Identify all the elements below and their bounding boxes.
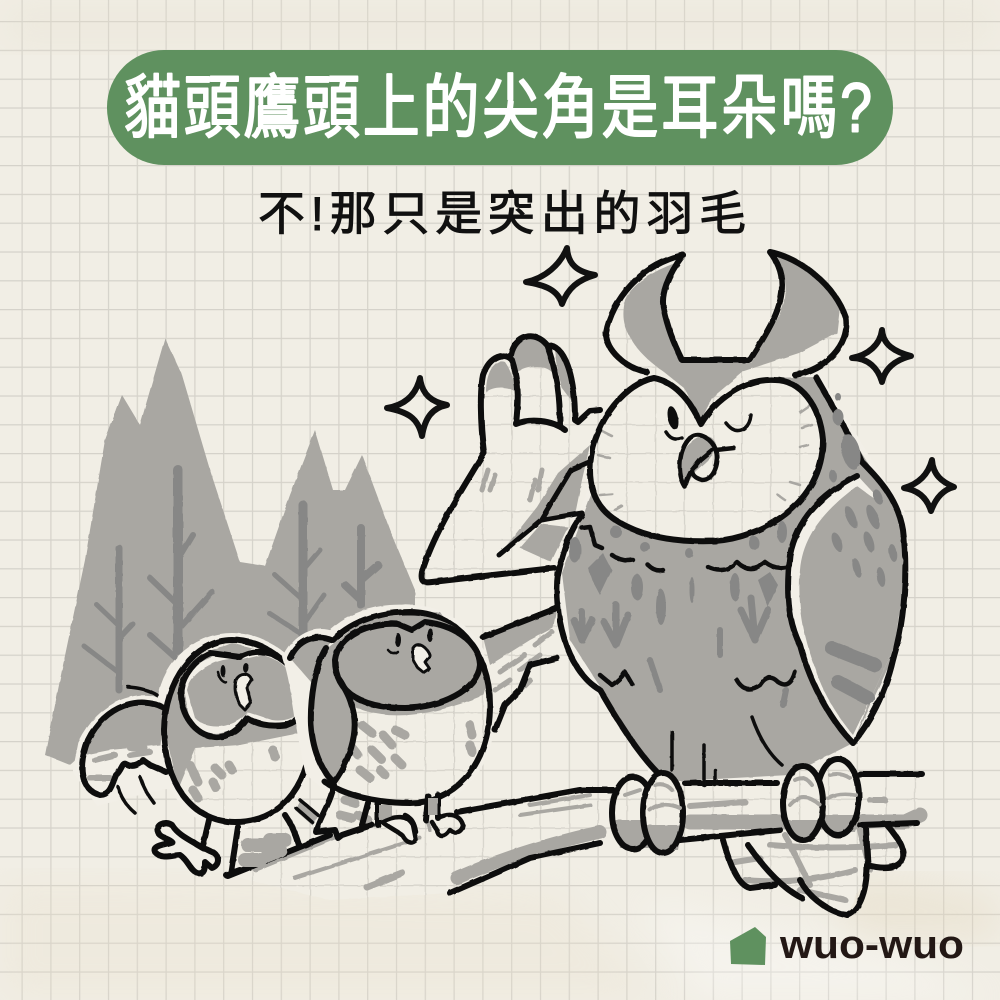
title text: 貓頭鷹頭上的尖角是耳朵嗎? — [124, 69, 872, 147]
legs and feet — [362, 795, 463, 843]
subtitle: 不!那只是突出的羽毛 — [258, 187, 746, 240]
face — [388, 628, 433, 672]
raised hand — [420, 336, 600, 583]
body feather markings — [569, 393, 864, 705]
left wing — [290, 638, 330, 690]
beak — [679, 436, 715, 488]
left wing — [85, 702, 164, 755]
left leaf wing — [311, 650, 353, 782]
forest background — [45, 338, 415, 765]
wing markings — [829, 488, 899, 698]
chest spots — [350, 725, 472, 778]
star sparkle 3 — [852, 330, 911, 382]
star sparkle 1 — [387, 378, 447, 436]
title pill — [107, 50, 893, 165]
leg stripe and tail — [295, 800, 318, 825]
mountains — [45, 338, 415, 765]
talons right — [783, 759, 860, 840]
chest spots — [190, 750, 275, 798]
closed eye and open eye — [666, 405, 751, 439]
body — [164, 640, 312, 822]
logo — [730, 923, 964, 967]
body — [558, 377, 905, 775]
face — [218, 663, 252, 710]
facial mask — [183, 650, 307, 733]
logo wordmark: wuo-wuo — [779, 923, 964, 967]
horn tufts — [606, 252, 846, 430]
logo house icon — [730, 927, 766, 965]
big owl — [557, 252, 905, 853]
tail feathers of big owl — [723, 825, 903, 915]
body — [312, 612, 490, 803]
legs and foot — [202, 815, 299, 875]
face disc — [590, 378, 823, 540]
star sparkle 4 — [904, 460, 954, 511]
small owl right — [290, 608, 557, 843]
branch — [228, 773, 923, 900]
title banner — [107, 50, 893, 165]
head and horns — [590, 252, 846, 541]
star sparkle 2 — [526, 248, 595, 304]
right wing — [483, 608, 557, 733]
facial mask — [337, 615, 477, 707]
bare trees — [84, 470, 378, 690]
wing — [788, 475, 903, 743]
talons left — [612, 773, 683, 853]
small owl left — [80, 640, 312, 875]
breast scallops — [582, 527, 795, 689]
